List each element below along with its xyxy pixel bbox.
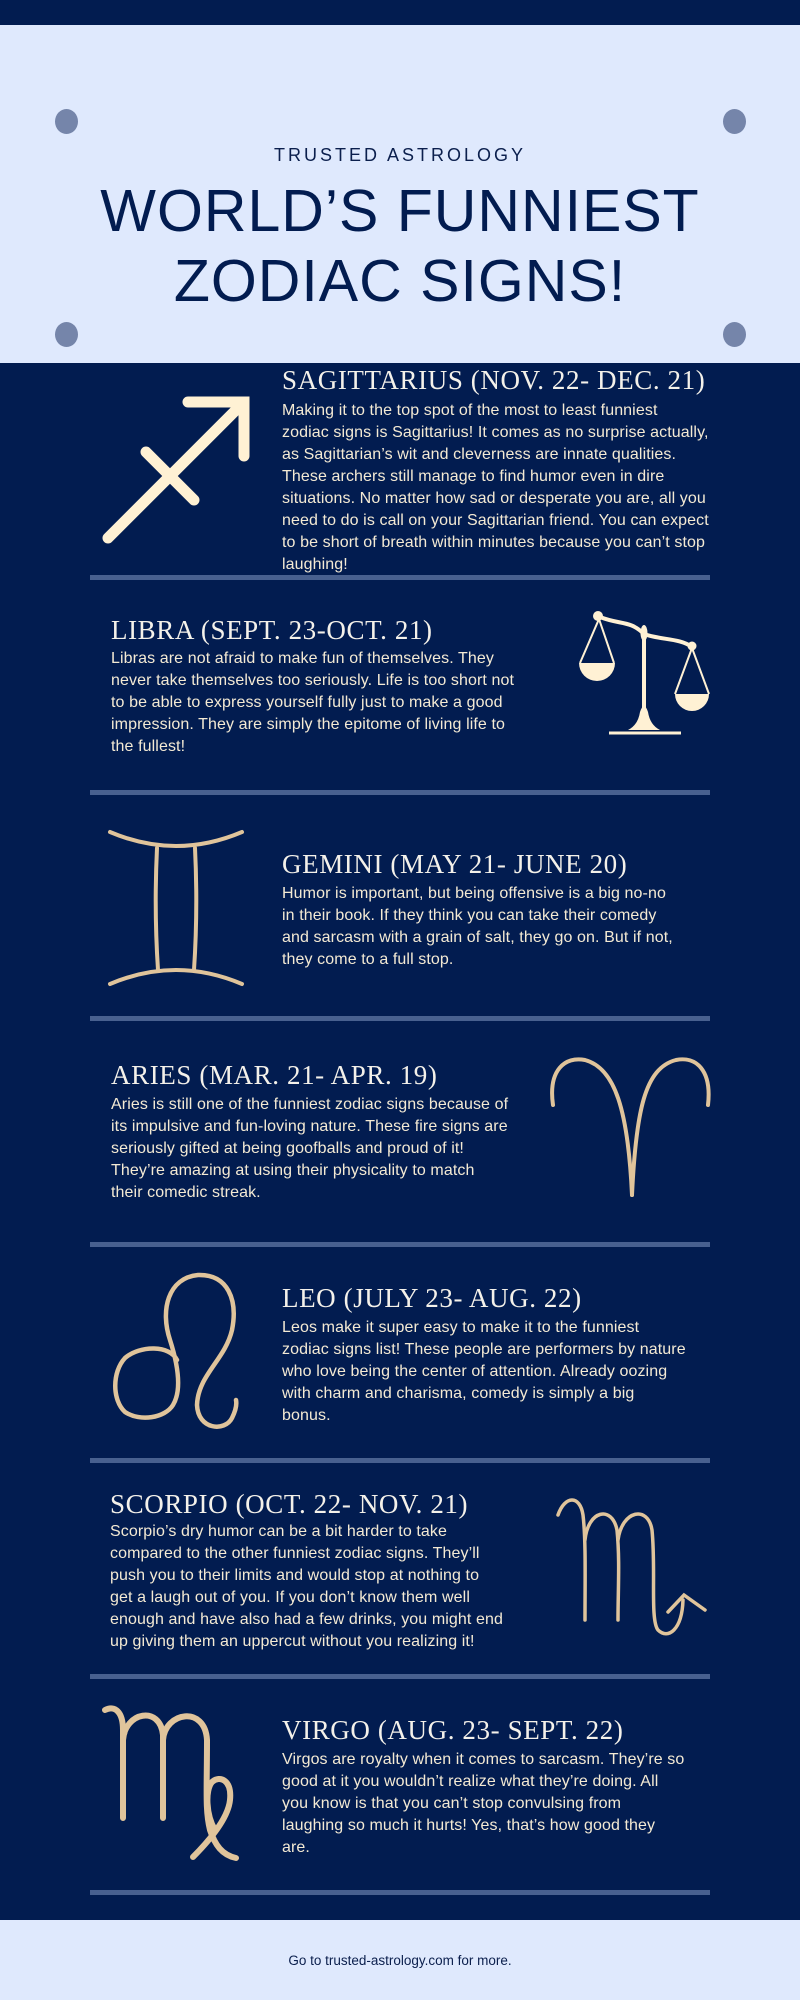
title: WORLD’S FUNNIEST: [100, 178, 700, 244]
text: gemini: Humor is important, but being offensive is a big no-no: [282, 885, 666, 902]
decorative dot bottom-left: [55, 322, 78, 347]
text: sagittarius: to be short of breath within minutes because you can’t stop: [282, 534, 705, 551]
heading: gemini: GEMINI (MAY 21- JUNE 20): [282, 849, 627, 879]
section: libra: [111, 615, 514, 755]
heading: sagittarius: SAGITTARIUS (NOV. 22- DEC. 21): [282, 365, 705, 395]
text: virgo: [282, 1751, 684, 1856]
text: virgo: laughing so much it hurts! Yes, that’s how good they: [282, 1817, 655, 1834]
text: sagittarius: need to do is call on your Sagittarian friend. You can expect: [282, 512, 709, 529]
text: libra: to be able to express yourself fully just to make a good: [111, 694, 503, 711]
text: gemini: they come to a full stop.: [282, 951, 453, 968]
text: aries: its impulsive and fun-loving nature. These fire signs are: [111, 1118, 508, 1135]
text: leo: zodiac signs list! These people are performers by nature: [282, 1341, 686, 1358]
text: virgo: Virgos are royalty when it comes to sarcasm. They’re so: [282, 1751, 684, 1768]
text: libra: the fullest!: [111, 738, 185, 755]
text: aries: [111, 1096, 508, 1201]
text: libra: never take themselves too seriously. Life is too short not: [111, 672, 514, 689]
text: scorpio: enough and have also had a few drinks, you might end: [110, 1611, 503, 1628]
top bar: [0, 0, 800, 25]
text: aries: Aries is still one of the funniest zodiac signs because of: [111, 1096, 508, 1113]
text: aries: their comedic streak.: [111, 1184, 261, 1201]
heading: leo: LEO (JULY 23- AUG. 22): [282, 1283, 582, 1313]
text: gemini: in their book. If they think you can take their comedy: [282, 907, 656, 924]
section: sagittarius: [282, 365, 709, 573]
text: scorpio: compared to the other funniest zodiac signs. They’ll: [110, 1545, 480, 1562]
text: leo: Leos make it super easy to make it to the funniest: [282, 1319, 639, 1336]
text: leo: who love being the center of attention. Already oozing: [282, 1363, 667, 1380]
text: virgo: are.: [282, 1839, 310, 1856]
heading: aries: ARIES (MAR. 21- APR. 19): [111, 1060, 437, 1090]
text: sagittarius: situations. No matter how sad or desperate you are, all you: [282, 490, 706, 507]
text: scorpio: Scorpio’s dry humor can be a bit harder to take: [110, 1523, 447, 1540]
text: aries: They’re amazing at using their physicality to match: [111, 1162, 474, 1179]
text: sagittarius: zodiac signs is Sagittarius! It comes as no surprise actually,: [282, 424, 709, 441]
decorative dot top-right: [723, 109, 746, 134]
text: scorpio: up giving them an uppercut without you realizing it!: [110, 1633, 475, 1650]
footer: [0, 1920, 800, 2000]
text: libra: impression. They are simply the epitome of living life to: [111, 716, 505, 733]
text: libra: Libras are not afraid to make fun of themselves. They: [111, 650, 494, 667]
section: scorpio: [110, 1489, 503, 1650]
text: leo: bonus.: [282, 1407, 331, 1424]
text: scorpio: [110, 1523, 503, 1650]
section: virgo: [282, 1715, 684, 1856]
text: virgo: good at it you wouldn’t realize what they’re doing. All: [282, 1773, 658, 1790]
text: gemini: [282, 885, 673, 968]
section: leo: [282, 1283, 686, 1424]
decorative dot top-left: [55, 109, 78, 134]
title: ZODIAC SIGNS!: [174, 248, 626, 314]
footer text: Go to trusted-astrology.com for more.: [288, 1953, 512, 1968]
decorative dot bottom-right: [723, 322, 746, 347]
text: sagittarius: [282, 402, 709, 573]
text: leo: [282, 1319, 686, 1424]
heading: libra: LIBRA (SEPT. 23-OCT. 21): [111, 615, 433, 645]
text: libra: [111, 650, 514, 755]
text: sagittarius: as Sagittarian’s wit and cleverness are innate qualities.: [282, 446, 676, 463]
text: gemini: and sarcasm with a grain of salt, they go on. But if not,: [282, 929, 673, 946]
text: scorpio: get a laugh out of you. If you don’t know them well: [110, 1589, 470, 1606]
text: leo: with charm and charisma, comedy is simply a big: [282, 1385, 634, 1402]
header panel: [0, 25, 800, 363]
text: scorpio: push you to their limits and would stop at nothing to: [110, 1567, 479, 1584]
heading: scorpio: SCORPIO (OCT. 22- NOV. 21): [110, 1489, 468, 1519]
text: virgo: you know is that you can’t stop convulsing from: [282, 1795, 621, 1812]
section: aries: [111, 1060, 508, 1201]
text: sagittarius: Making it to the top spot of the most to least funniest: [282, 402, 657, 419]
text: aries: seriously gifted at being goofballs and proud of it!: [111, 1140, 464, 1157]
text: sagittarius: These archers still manage to find humor even in dire: [282, 468, 664, 485]
heading: virgo: VIRGO (AUG. 23- SEPT. 22): [282, 1715, 623, 1745]
title: [100, 178, 700, 314]
text: sagittarius: laughing!: [282, 556, 348, 573]
section: gemini: [282, 849, 673, 968]
subtitle: TRUSTED ASTROLOGY: [274, 145, 526, 165]
